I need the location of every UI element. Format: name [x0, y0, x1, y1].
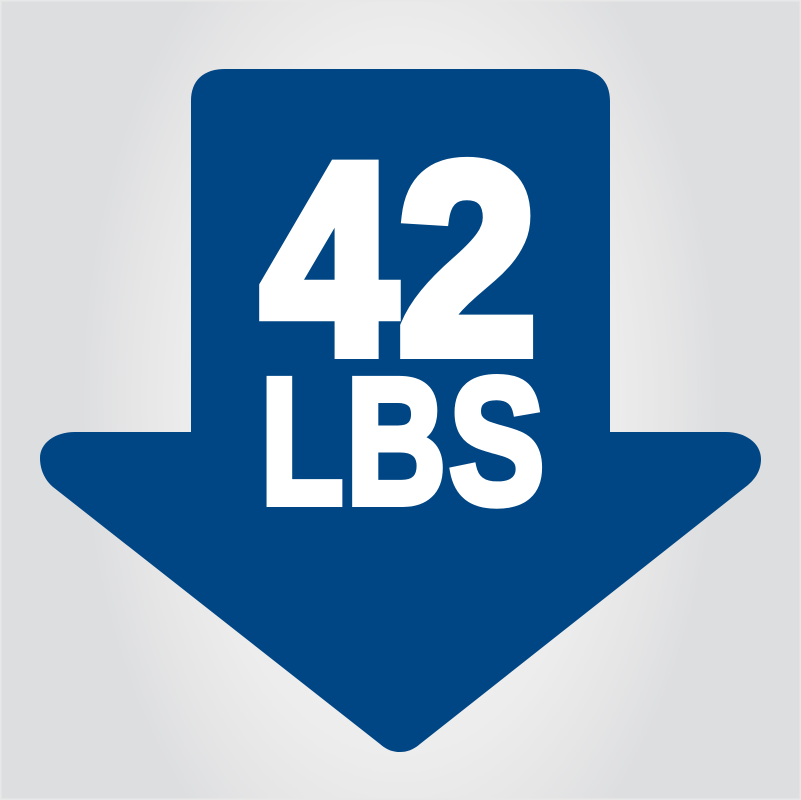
label: LBS — [260, 341, 544, 541]
number: 42 — [262, 109, 537, 410]
number: 42: 4 — [262, 109, 397, 410]
icon: down arrow — [40, 69, 761, 752]
number: 42: 2 — [398, 109, 537, 410]
label: LBS: S — [449, 341, 544, 541]
label: LBS: L — [260, 341, 344, 541]
label: LBS: B — [346, 341, 446, 541]
